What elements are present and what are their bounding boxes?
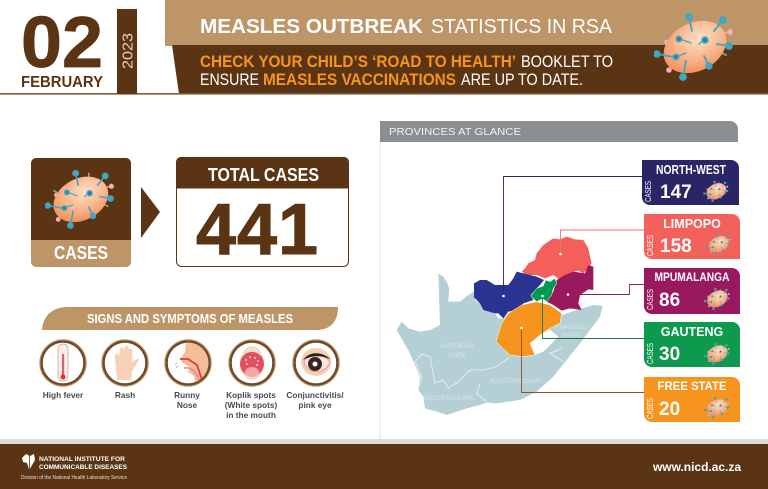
internal boundaries [415,348,563,402]
card: gauteng: CASES [646,343,655,364]
symptoms heading: SIGNS AND SYMPTOMS OF MEASLES [87,312,293,326]
date day number: 02 [21,3,103,83]
icon: cases virus [45,168,116,231]
card: mpumalanga: MPUMALANGA [654,270,730,284]
footer organisation text: COMMUNICABLE DISEASES [39,464,127,471]
title: STATISTICS IN RSA [431,16,613,38]
symptom labels: Runny [174,390,200,400]
card: north-west: NORTH-WEST [656,163,726,177]
map labels [423,324,589,402]
card: limpopo [644,214,740,259]
subtitle message: ARE UP TO DATE. [461,71,583,89]
panel: total cases [176,157,349,270]
icon: conjunctivitis eye [293,340,339,386]
panel: provinces heading [380,121,738,142]
gauteng region [531,278,557,302]
callout: gauteng leader [542,296,644,338]
free state region [496,302,562,357]
subtitle message: MEASLES VACCINATIONS [263,71,456,89]
symptom labels: Nose [177,400,198,410]
base country [397,273,603,415]
card: free state: FREE STATE [658,379,726,393]
callout: mpumalanga leader [568,284,644,294]
card: north-west [642,160,739,205]
mpumalanga region [547,265,593,311]
footer organisation text: NATIONAL INSTITUTE FOR [39,456,125,463]
symptoms heading [42,307,338,330]
card: limpopo: 158 [660,236,692,257]
icon: high fever thermometer [40,340,86,386]
footer band [0,439,768,489]
callout: free state leader [522,328,644,392]
card: mpumalanga: CASES [646,289,655,310]
map labels: CAPE [448,352,467,359]
card: free state [644,377,740,422]
symptom labels: pink eye [298,400,332,410]
card: limpopo: LIMPOPO [663,217,721,231]
north west region [474,272,544,318]
subtitle message: ENSURE [200,71,259,89]
symptom labels: Rash [115,390,135,400]
symptom labels: High fever [43,390,84,400]
map labels: KWAZULU- [555,324,589,331]
icon: header virus [654,11,735,83]
cases label: CASES [54,243,108,263]
map labels: NATAL [562,332,582,339]
card: gauteng: GAUTENG [661,325,723,339]
card: north-west: 147 [660,182,692,203]
map dots [502,253,569,329]
date year [117,9,137,94]
subtitle message: CHECK YOUR CHILD’S ‘ROAD TO HEALTH’ [200,53,516,71]
map labels: EASTERN CAPE [491,378,542,385]
limpopo region [522,237,592,280]
map labels: WESTERN CAPE [423,395,476,402]
lesotho [528,328,558,355]
symptom labels: (White spots) [225,400,278,410]
header band [0,0,768,95]
card: limpopo: CASES [646,235,655,256]
symptom labels: in the mouth [226,410,276,420]
icon: rash hand [102,340,148,386]
subtitle message [200,53,613,89]
map labels: NOTHERN [441,343,473,350]
date year: 2023 [120,33,136,69]
card: free state: 20 [659,399,680,420]
title: MEASLES OUTBREAK [200,16,424,38]
card: mpumalanga [644,268,740,314]
symptom labels: Koplik spots [226,390,276,400]
card: free state: CASES [646,398,655,419]
footer logo [22,454,35,469]
card: mpumalanga: 86 [659,290,680,311]
symptom labels [43,390,344,420]
title [200,16,613,38]
subtitle message: BOOKLET TO [521,53,613,71]
icon: koplik spots mouth [229,340,275,386]
arrow [141,187,160,238]
card: gauteng: 30 [659,344,680,365]
total cases number: 441 [196,190,318,270]
map of South Africa [397,237,603,415]
callout: north-west leader [504,176,642,296]
footer organisation text: Division of the National Health Laboratory Service [21,475,127,481]
panel: cases tile [31,158,131,267]
icon: runny nose [165,340,212,388]
card: gauteng [644,322,740,367]
total cases heading: TOTAL CASES [208,165,319,185]
callout: limpopo leader [560,230,644,254]
footer organisation text [21,456,127,481]
panel: provinces heading: PROVINCES AT GLANCE [389,126,521,138]
card: north-west: CASES [644,181,653,202]
symptom labels: Conjunctivitis/ [286,390,344,400]
footer website: www.nicd.ac.za [652,460,741,474]
date month: FEBRUARY [21,74,103,91]
